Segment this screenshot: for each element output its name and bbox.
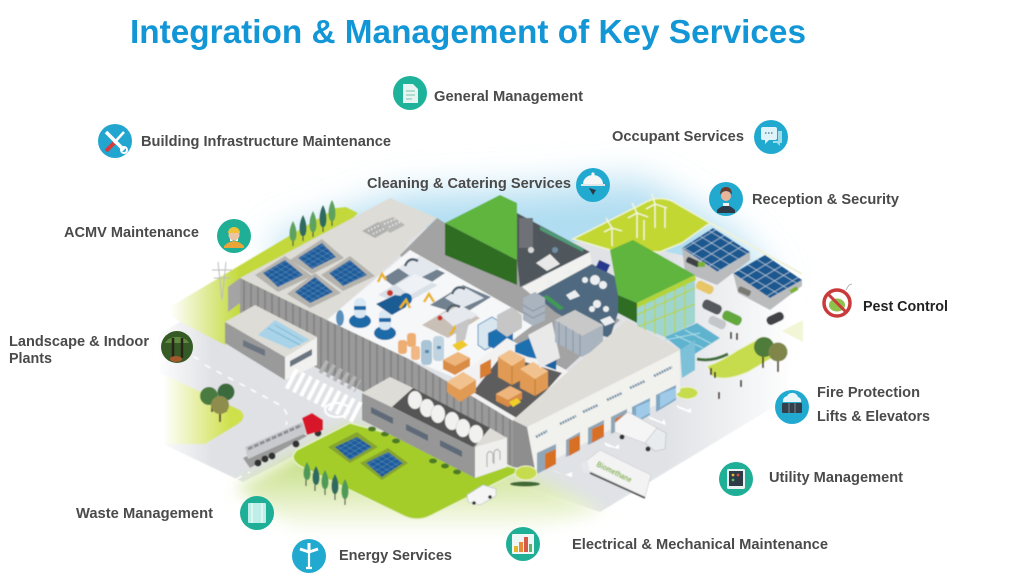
windows (243, 340, 312, 367)
carports (682, 228, 802, 310)
office rear contents (519, 218, 583, 271)
label: General Management (434, 89, 583, 105)
red parts (387, 290, 393, 296)
ground: roads and yards (158, 220, 805, 512)
back corridor grey floor (400, 218, 620, 375)
garden shrubs (697, 354, 728, 360)
blue reactors (336, 293, 412, 340)
icon: document (393, 76, 427, 110)
ground fade lower right (625, 400, 830, 540)
label: Reception & Security (752, 192, 899, 208)
office screen (596, 260, 610, 272)
conifers behind building (290, 200, 336, 246)
service: Waste Management (76, 496, 274, 530)
office wall (522, 252, 592, 296)
process line 3 (378, 274, 438, 305)
left wing ribbed facade (240, 278, 513, 467)
right wing end wall (513, 420, 535, 470)
orange door (480, 359, 491, 379)
label: Occupant Services (612, 129, 744, 145)
service: Pest Control (824, 284, 948, 316)
service: General Management (393, 76, 583, 110)
service: Electrical & Mechanical Maintenance (506, 527, 828, 561)
road dashes (170, 345, 287, 485)
yellow forklift (509, 398, 521, 407)
parking trees (754, 337, 788, 372)
orange box (443, 352, 470, 375)
icon: wrench and screwdriver (98, 124, 132, 158)
grey machines (456, 307, 522, 345)
icon: cloud over panel (775, 390, 809, 424)
right wing roof (513, 320, 680, 427)
orange tanks (398, 333, 420, 360)
biomethane truck: Biomethane (595, 460, 634, 485)
icon: cloche (576, 168, 610, 202)
white van (467, 485, 496, 505)
label: Energy Services (339, 548, 452, 564)
yellow cart (452, 340, 468, 351)
label: Building Infrastructure Maintenance (141, 134, 391, 150)
warehouse dark floor (473, 355, 562, 420)
lobby glass column (680, 340, 695, 378)
warehouse contents (447, 338, 557, 407)
facade stub (228, 278, 240, 312)
icon: worker (217, 219, 251, 253)
front tank building (362, 377, 507, 478)
label: Pest Control (863, 299, 948, 315)
right lawn with wind farm (573, 198, 710, 252)
label: Waste Management (76, 506, 213, 522)
label: fire protection: Fire Protection (817, 385, 920, 401)
pale triangle (782, 320, 803, 342)
factory equipment (336, 256, 522, 375)
roof solar arrays (255, 239, 375, 308)
green block one (445, 195, 517, 285)
icon: equalizer panel (506, 527, 540, 561)
garden strip (707, 337, 782, 378)
people (710, 332, 742, 399)
service: Landscape & Indoor Plants (9, 331, 193, 367)
biomethane truck (581, 450, 651, 498)
blue containers (515, 338, 557, 370)
illustration (158, 180, 830, 540)
tanker truck (243, 413, 323, 468)
wind turbines (604, 194, 667, 246)
vent pipes (487, 450, 500, 467)
label: Plants (9, 351, 52, 367)
shrubs (368, 426, 461, 474)
process line 1 (383, 256, 445, 290)
road arrows (552, 405, 691, 477)
orange stack c (520, 362, 548, 396)
label: Landscape & Indoor (9, 334, 149, 350)
label: Cleaning & Catering Services (367, 176, 571, 192)
road marking (325, 403, 349, 417)
label: ACMV Maintenance (64, 225, 199, 241)
lower left lawn (158, 372, 244, 444)
icon: tablet (719, 462, 753, 496)
service: Cleaning & Catering Services (367, 168, 610, 202)
solar arrays on lawn (328, 432, 408, 480)
storage racks right (523, 292, 603, 357)
icon: windmill (292, 539, 326, 573)
title: Integration & Management of Key Services (130, 13, 806, 50)
green block two and glass lobby (610, 240, 720, 357)
crosswalk (290, 366, 360, 414)
green fade under front lawn (235, 427, 605, 532)
sky glow (270, 180, 775, 330)
left utility building (225, 305, 317, 380)
service: Utility Management (719, 462, 903, 496)
right wing white facade (527, 350, 680, 470)
dock white floor piece (528, 322, 560, 368)
label: Utility Management (769, 470, 903, 486)
label: Electrical & Mechanical Maintenance (572, 537, 828, 553)
white tanks (408, 391, 483, 443)
office furniture (547, 270, 615, 326)
silver blue tanks (421, 336, 444, 365)
icon: speech bubbles (754, 120, 788, 154)
factory white floor (327, 250, 537, 380)
round garden (676, 387, 698, 399)
front building windows (371, 407, 462, 457)
white delivery truck (615, 412, 666, 452)
roof vents (362, 217, 405, 238)
service: ACMV Maintenance (64, 219, 251, 253)
cars (695, 280, 785, 330)
office rear dark floor (517, 213, 590, 287)
front lawn (293, 423, 522, 519)
icon: no pests (824, 284, 852, 316)
process line 2 (430, 285, 491, 315)
warehouse surround (450, 338, 570, 425)
left trees (200, 384, 234, 422)
blue tanks on roof (258, 320, 310, 349)
round bed and shrubs at dock (510, 466, 540, 486)
orange stack a (447, 372, 476, 402)
left lawn (165, 207, 358, 345)
office front floor (535, 264, 618, 338)
service: Building Infrastructure Maintenance (98, 124, 391, 158)
office green edge (543, 295, 564, 310)
label: lifts and elevators: Lifts & Elevators (817, 409, 930, 425)
power pylon (212, 262, 232, 300)
lawn edge fading right (710, 223, 802, 274)
service: Energy Services (292, 539, 452, 573)
yellow robot arms (378, 274, 521, 335)
service: Occupant Services (612, 120, 788, 154)
icon: forest photo (161, 331, 193, 363)
service: Fire Protection and Lifts & Elevators (775, 385, 930, 425)
dock doors (537, 385, 676, 474)
orange low box (496, 386, 522, 407)
icon: cylinder (240, 496, 274, 530)
icon: receptionist (709, 182, 743, 216)
row of conifers on lawn (304, 462, 348, 505)
blue cage rack (478, 317, 513, 350)
service: Reception & Security (709, 182, 899, 216)
process line 4 (422, 305, 480, 338)
orange stack b (498, 350, 525, 385)
left wing roof (228, 198, 437, 320)
dock window strips (536, 367, 672, 437)
